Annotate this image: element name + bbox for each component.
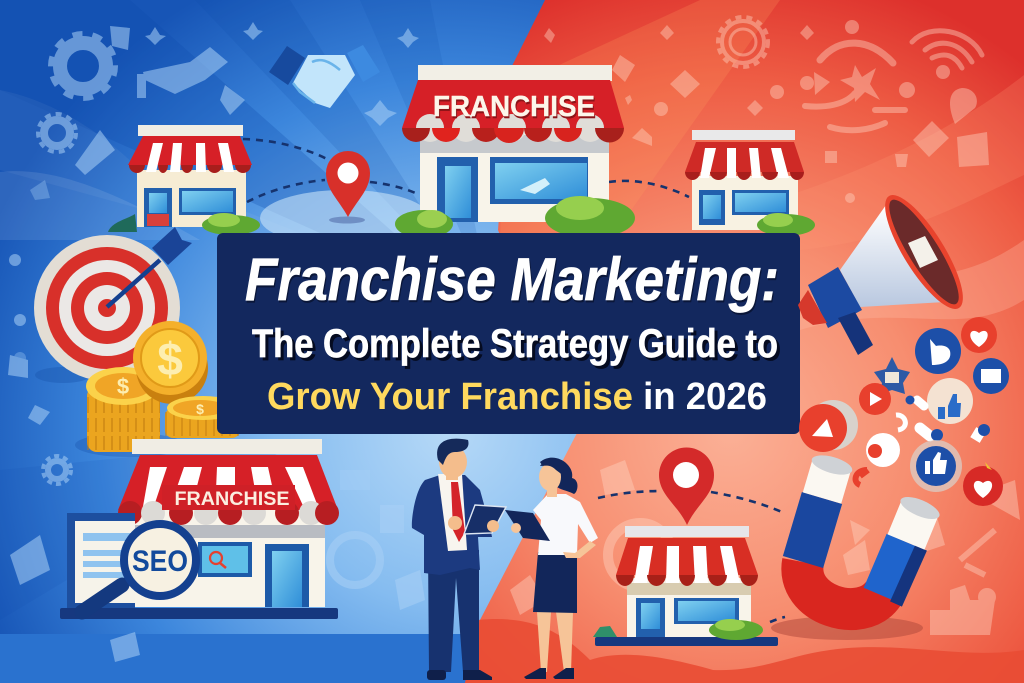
woman's arm xyxy=(563,541,596,558)
main shop scalloped edge xyxy=(402,114,624,143)
megaphone xyxy=(798,185,976,355)
woman's heels xyxy=(524,668,574,679)
blue thumbs bubble xyxy=(910,440,962,492)
dart xyxy=(107,227,192,307)
bottom shop sign: FRANCHISE xyxy=(174,489,290,510)
dashed route lines xyxy=(243,139,785,622)
main shop door xyxy=(437,157,478,222)
title line 1: Franchise Marketing: xyxy=(245,246,779,313)
big red bubble xyxy=(799,400,858,452)
red play bubble xyxy=(859,383,891,415)
shop: bottom left franchise with SEO laptop xyxy=(60,439,339,619)
shop: bottom center xyxy=(593,526,778,646)
background decorations: red side confetti xyxy=(510,17,1020,635)
SEO magnifier: SEO xyxy=(132,545,188,578)
megaphone cone xyxy=(840,205,945,307)
location pin: top xyxy=(326,151,370,224)
laptop xyxy=(60,513,338,619)
SEO magnifier xyxy=(82,524,196,612)
man's head xyxy=(437,439,468,480)
white ball xyxy=(866,433,900,467)
shop: main franchise xyxy=(402,65,624,222)
background: red side xyxy=(465,0,1024,683)
play bubble xyxy=(915,328,961,374)
man's hand xyxy=(448,516,462,530)
man's shoes xyxy=(427,670,492,680)
woman's blouse xyxy=(533,494,598,555)
gold coins: $ xyxy=(196,401,204,417)
woman's skirt xyxy=(533,552,577,613)
shop: right small xyxy=(685,130,804,230)
woman xyxy=(524,458,598,679)
woman's legs xyxy=(537,612,573,672)
title line 2: The Complete Strategy Guide to xyxy=(252,322,778,366)
mail bubble xyxy=(973,358,1009,394)
title line 3: Grow Your Franchise in 2026 xyxy=(267,376,767,418)
gold coins: $ xyxy=(117,374,129,399)
bushes under main shop xyxy=(395,196,635,238)
megaphone blue band xyxy=(808,267,862,328)
man in suit xyxy=(412,439,492,680)
megaphone red cap xyxy=(798,290,827,325)
handshake icon xyxy=(269,45,380,108)
shop: left small xyxy=(108,125,260,235)
gold coins xyxy=(75,321,240,457)
bottom shop window xyxy=(198,542,252,577)
location pin: bottom xyxy=(659,447,714,525)
bush right xyxy=(757,213,815,236)
man's legs xyxy=(428,550,479,672)
man's jacket xyxy=(412,475,492,575)
gold coins: $ xyxy=(157,333,183,385)
target with arrow xyxy=(34,227,192,383)
man's shirt and tie xyxy=(438,474,467,551)
thumbs up bubble xyxy=(927,378,973,424)
clipboards xyxy=(464,505,550,541)
background decorations: blue side icons xyxy=(8,22,425,662)
woman's head xyxy=(539,458,578,497)
title panel xyxy=(217,233,800,434)
small pills xyxy=(856,396,990,485)
main shop window xyxy=(490,157,588,204)
main shop sign: FRANCHISE xyxy=(433,91,595,123)
megaphone bell xyxy=(872,185,976,319)
megaphone handle xyxy=(838,312,873,355)
social icons cloud xyxy=(799,317,1009,506)
bottom shop door xyxy=(265,544,309,607)
horseshoe magnet xyxy=(771,452,942,640)
heart bubble xyxy=(961,317,997,353)
star bubble xyxy=(874,357,910,394)
red heart bubble xyxy=(963,462,1003,506)
